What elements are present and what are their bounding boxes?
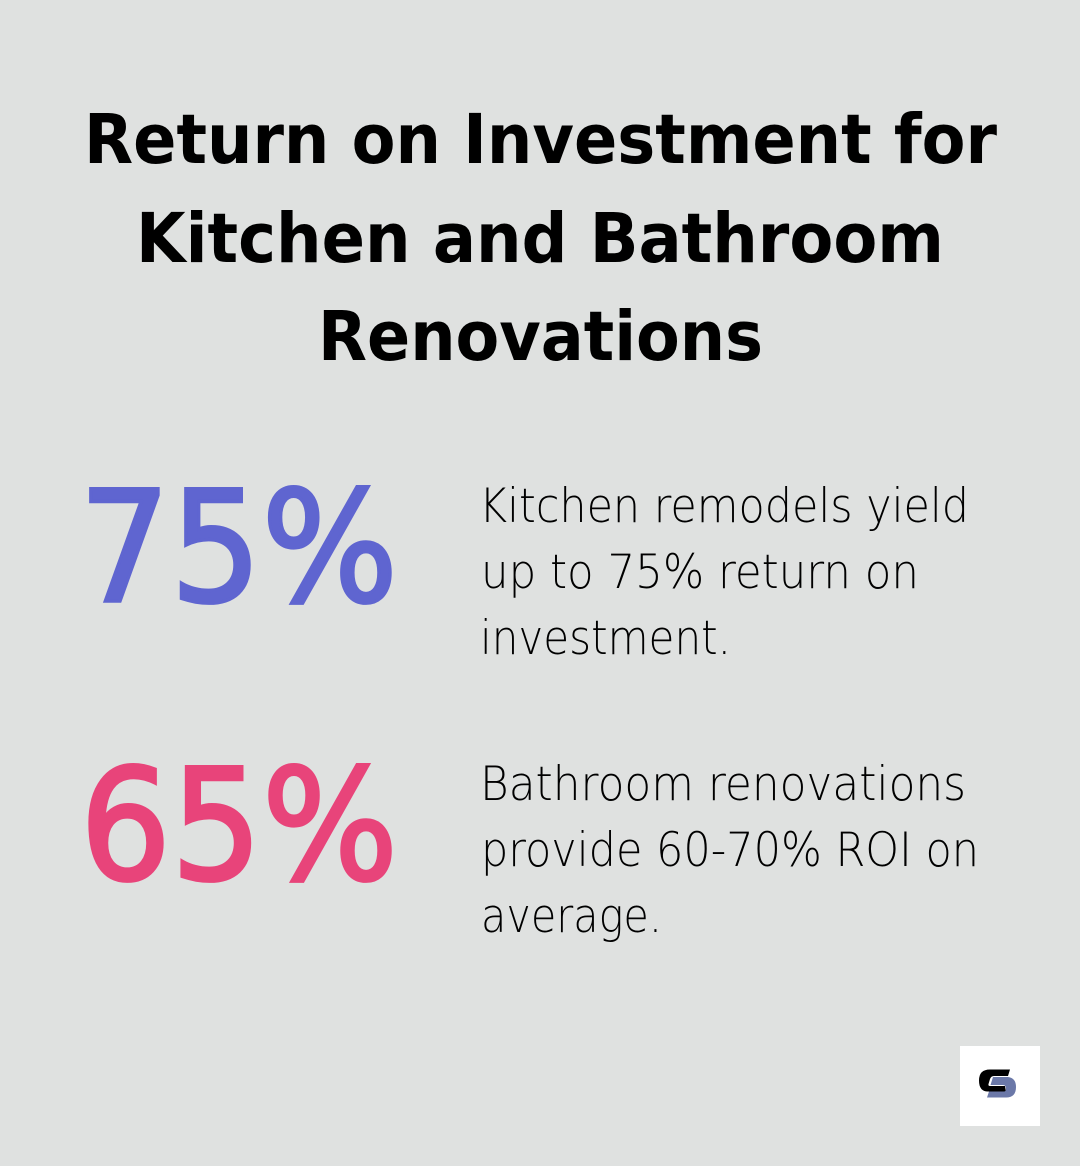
title: Return on Investment for (84, 100, 997, 180)
stat: 65%: 65% (80, 737, 398, 916)
text: kitchen remodels: up to 75% return on (481, 545, 919, 600)
title: Renovations (318, 297, 763, 377)
stat: 75%: 75% (79, 459, 398, 638)
text: kitchen remodels: investment. (480, 611, 731, 666)
logo badge (960, 1046, 1040, 1126)
text: bathroom renovations: average. (481, 889, 662, 944)
text: bathroom renovations: Bathroom renovations (480, 757, 966, 812)
text: kitchen remodels: Kitchen remodels yield (479, 479, 969, 534)
text: bathroom renovations (480, 757, 979, 944)
text: kitchen remodels (479, 479, 969, 666)
text: bathroom renovations: provide 60-70% ROI on (481, 823, 979, 878)
title (84, 100, 997, 377)
title: Kitchen and Bathroom (136, 199, 944, 279)
